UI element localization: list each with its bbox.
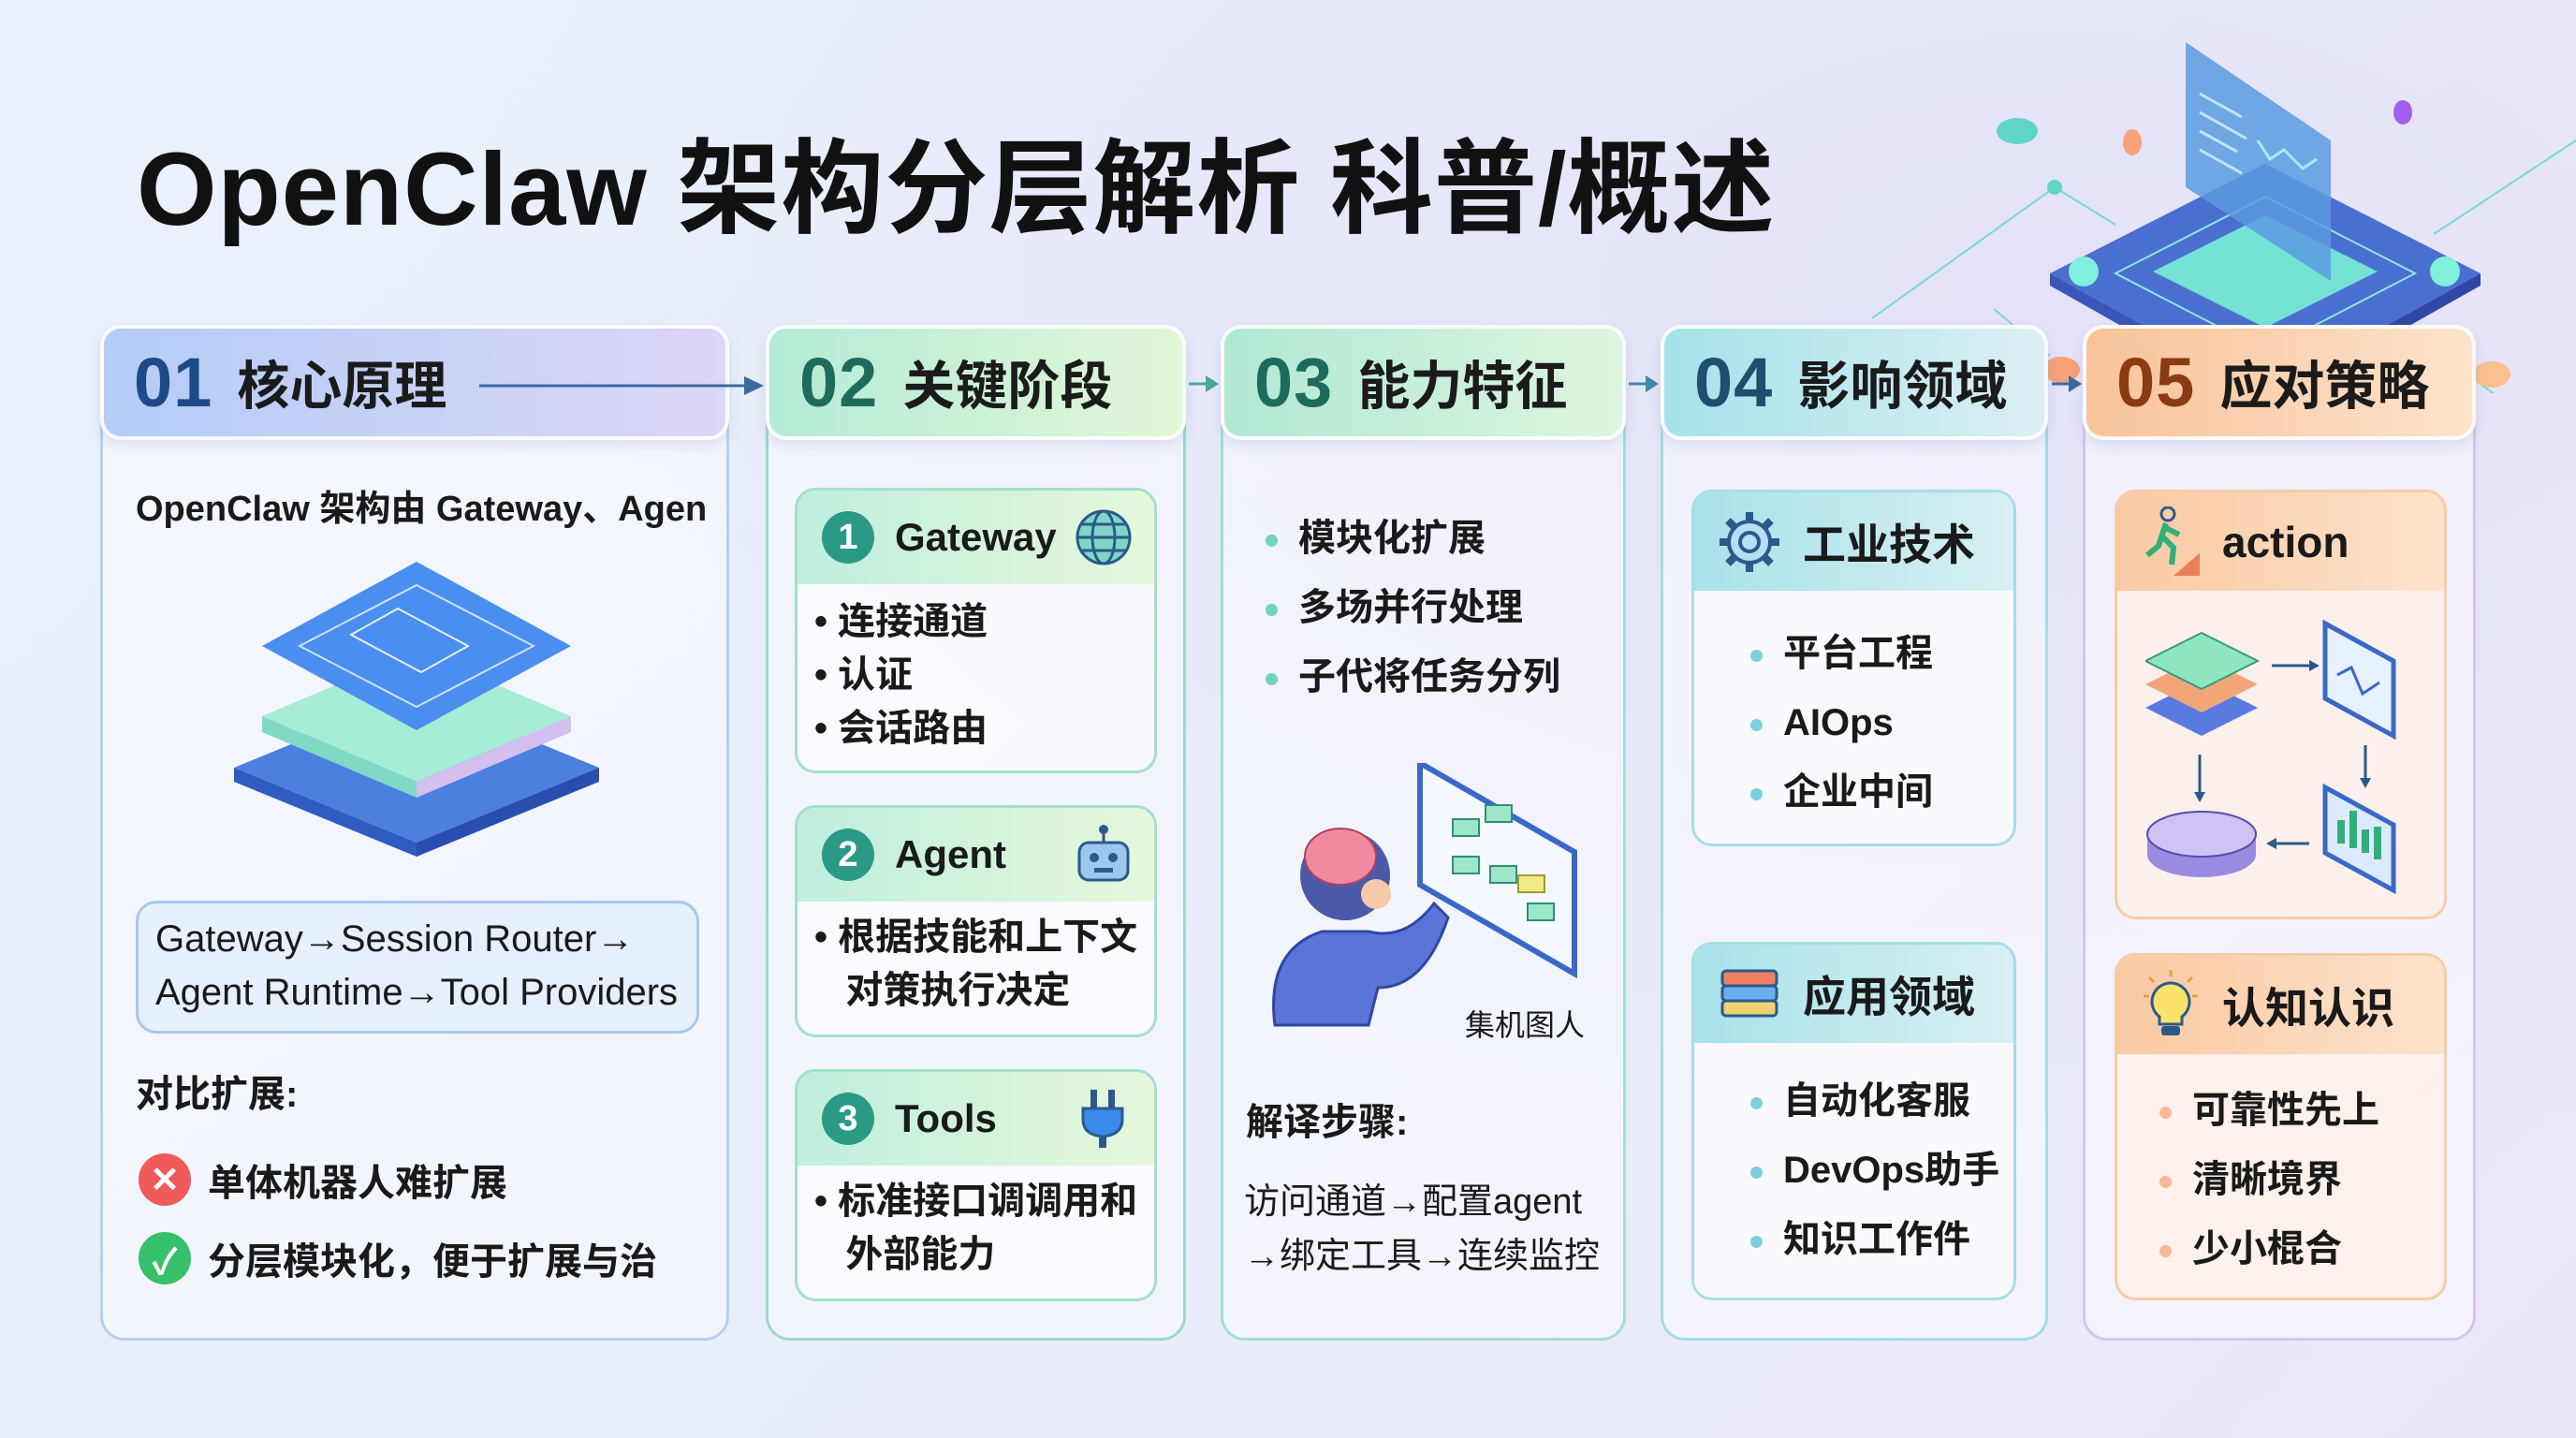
flow box: Gateway→Session Router→ (155, 918, 634, 960)
item: negative: 单体机器人难扩展 (208, 1163, 507, 1204)
card: Tools: 3 (838, 1099, 858, 1138)
card: Tools: 外部能力 (845, 1234, 995, 1275)
panel: 05 应对策略 (2083, 325, 2476, 1341)
card: 应用领域: 自动化客服 (1783, 1080, 1970, 1122)
card: 认知认识: 可靠性先上 (2192, 1090, 2379, 1131)
header 01: 核心原理 (237, 357, 446, 416)
header 04: 04 (1694, 344, 1773, 421)
bullet list: 模块化扩展 (1298, 518, 1486, 559)
card: Agent: Agent (895, 832, 1006, 876)
card: 工业技术: 工业技术 (1803, 521, 1975, 569)
icon: layered stack (234, 562, 599, 857)
card: Agent (795, 805, 1157, 1037)
bullet list: 多场并行处理 (1298, 587, 1523, 628)
card: 工业技术: 平台工程 (1783, 633, 1933, 674)
card: 应用领域: DevOps助手 (1783, 1150, 1999, 1191)
bullet list: 子代将任务分列 (1298, 656, 1560, 697)
arrow: 03 to 04 (1629, 375, 1659, 392)
card: Agent: 对策执行决定 (845, 970, 1070, 1011)
steps text: →绑定工具→连续监控 (1244, 1237, 1600, 1276)
bullet list (1266, 518, 1560, 697)
card: Gateway (795, 488, 1157, 773)
steps text: 访问通道→配置agent (1244, 1182, 1582, 1222)
item: positive: ✓ (152, 1243, 178, 1283)
item: negative: ✕ (150, 1161, 180, 1200)
steps heading: 解译步骤: (1246, 1102, 1408, 1143)
arrow: 02 to 03 (1189, 375, 1219, 392)
card: Tools: Tools (895, 1096, 997, 1140)
decorative platform illustration top right (1872, 42, 2576, 393)
card: Gateway: • 会话路由 (814, 708, 988, 749)
header 04: 影响领域 (1797, 357, 2007, 416)
item: positive (139, 1232, 657, 1284)
title: OpenClaw 架构分层解析 科普/概述 (137, 132, 1776, 247)
caption: 集机图人 (1465, 1008, 1585, 1042)
header 03: 能力特征 (1357, 357, 1567, 416)
card: 认知认识: 少小棍合 (2192, 1228, 2342, 1269)
header 04 (1661, 325, 2048, 440)
illustration: person at board (1272, 763, 1577, 1026)
card: 应用领域: 知识工作件 (1783, 1219, 1970, 1260)
panel: 03 能力特征 (1221, 325, 1626, 1341)
card: Gateway: Gateway (895, 515, 1057, 559)
header 02: 02 (799, 344, 878, 421)
flow box (136, 901, 699, 1034)
card: 认知认识: 认知认识 (2222, 983, 2394, 1032)
header 03 (1221, 325, 1626, 440)
panel: 02 关键阶段 (766, 325, 1186, 1341)
item: negative (139, 1153, 507, 1206)
flow box: Agent Runtime→Tool Providers (155, 972, 678, 1013)
card: Gateway: • 连接通道 (814, 601, 988, 642)
card: Tools: • 标准接口调调用和 (814, 1181, 1137, 1222)
arrow: header connector (479, 376, 764, 395)
card: 工业技术: 企业中间 (1783, 771, 1933, 813)
card: action: action (2222, 517, 2349, 565)
arrow: 04 to 05 (2052, 375, 2082, 392)
header 02: 关键阶段 (902, 357, 1112, 416)
header 01: 01 (134, 344, 212, 421)
card: Agent: • 根据技能和上下文 (814, 917, 1137, 958)
item: positive: 分层模块化，便于扩展与治 (208, 1241, 657, 1283)
comparison heading: 对比扩展: (136, 1074, 298, 1115)
steps text (1244, 1182, 1600, 1276)
card: Gateway: • 认证 (814, 654, 913, 696)
card: 工业技术: AIOps (1783, 702, 1894, 743)
intro text: OpenClaw 架构由 Gateway、Agen (136, 490, 707, 529)
panel: 04 影响领域 (1661, 325, 2048, 1341)
header 02 (766, 325, 1186, 440)
card: action (2115, 490, 2447, 919)
card: 认知认识: 清晰境界 (2192, 1159, 2342, 1200)
header 01 (100, 325, 729, 440)
card: Tools (795, 1069, 1157, 1301)
header 05: 05 (2116, 344, 2195, 421)
card: Agent: 2 (838, 835, 858, 874)
card: 应用领域: 应用领域 (1803, 972, 1975, 1020)
header 05 (2083, 325, 2476, 440)
card: 认知认识 (2115, 953, 2447, 1300)
card: 工业技术 (1691, 490, 2016, 846)
header 05: 应对策略 (2219, 357, 2429, 416)
header 03: 03 (1254, 344, 1333, 421)
card: 应用领域 (1691, 942, 2016, 1300)
panel: 01 核心原理 (100, 325, 729, 1341)
card: Gateway: 1 (838, 517, 858, 556)
